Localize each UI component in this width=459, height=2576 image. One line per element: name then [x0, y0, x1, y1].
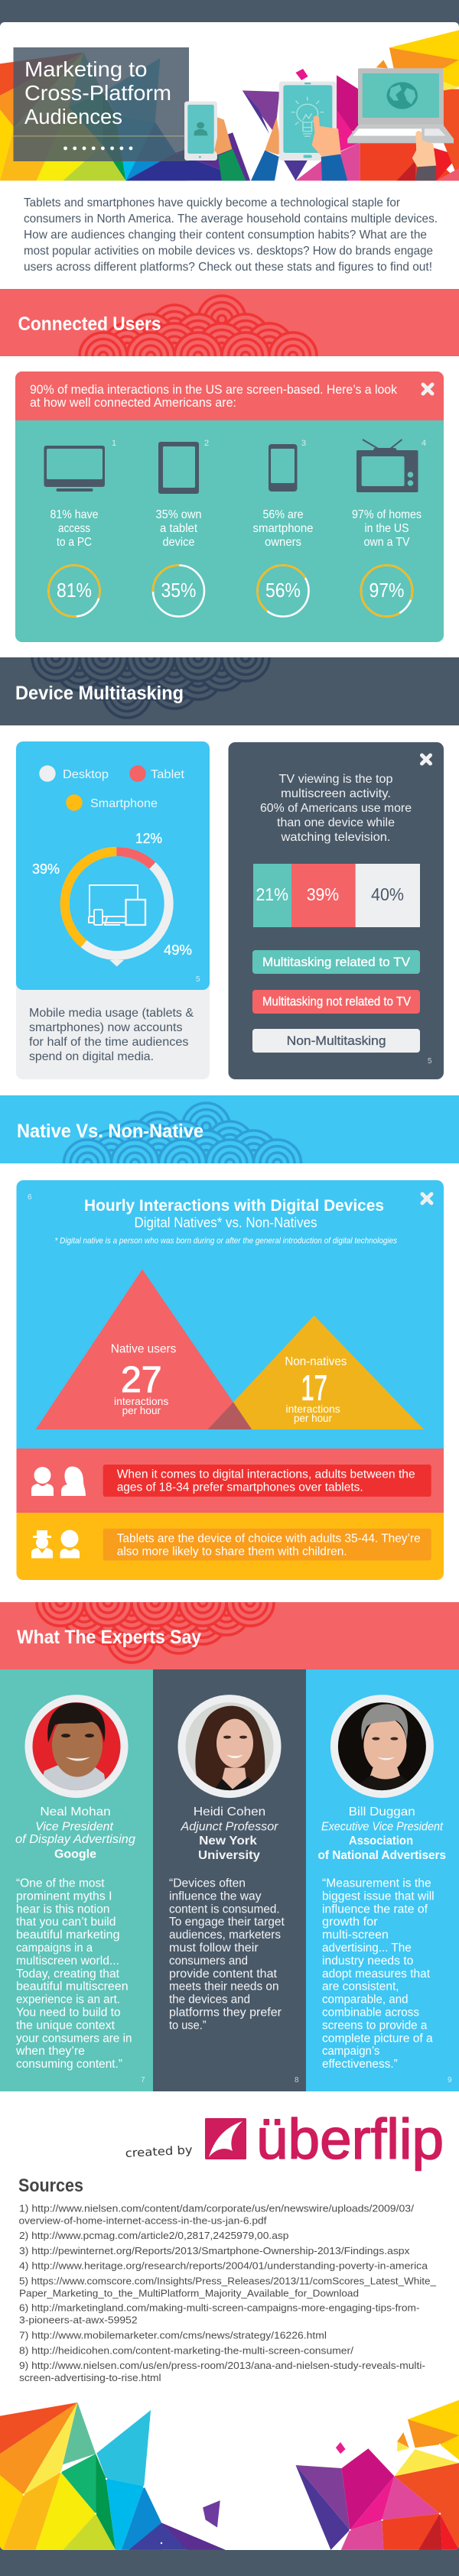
intro paragraph: consumers in North America. The average household contains multiple devices. [24, 213, 438, 225]
intro paragraph: most popular activities on mobile devices vs. desktops? How do brands engage [24, 245, 433, 258]
name and title: Heidi Cohen [194, 1805, 265, 1818]
heading: Connected Users [18, 313, 161, 335]
quote: experience is an art. [16, 1994, 120, 2007]
created by credit [125, 2107, 444, 2171]
chart title: * Digital native is a person who was born during or after the general introduction of digital technologies [55, 1237, 397, 1246]
quote: Today, creating that [16, 1968, 120, 1981]
quote: comparable, and [322, 1994, 409, 2007]
callout: 35-44: also more likely to share them with children. [117, 1545, 347, 1558]
legend button: related [252, 950, 420, 974]
intro paragraph: How are audiences changing their content consumption habits? What are the [24, 229, 427, 242]
intro paragraph [24, 196, 438, 274]
callout: 18-34: When it comes to digital interactions, adults between the [117, 1468, 415, 1481]
non-natives label: Non-natives [285, 1355, 347, 1368]
name and title: Bill Duggan [349, 1805, 415, 1818]
intro paragraph: users across different platforms? Check out these stats and figures to find out! [24, 261, 432, 274]
hero polygon artwork [0, 30, 459, 180]
progress ring: 35%: 35% [161, 579, 196, 602]
legend button: related: Multitasking related to TV [262, 955, 411, 969]
non-natives label [285, 1355, 347, 1424]
quote: consuming content.” [16, 2058, 122, 2071]
logo wordmark: überflip [256, 2107, 444, 2171]
sources [18, 2175, 437, 2383]
quote: “One of the most [16, 1877, 105, 1890]
stacked bar chart: 39% [307, 884, 339, 904]
donut chart: 39% [32, 861, 60, 877]
quote: campaigns in a [16, 1942, 93, 1955]
legend: Smartphone [90, 797, 158, 810]
stat: smartphone: smartphone [252, 522, 314, 535]
quote: multi-screen [322, 1929, 389, 1942]
quote: hear is this notion [16, 1903, 110, 1916]
icon: television: 4 [422, 439, 426, 448]
callout: 35-44 [103, 1529, 431, 1561]
stat: TV [352, 509, 421, 546]
legend: Desktop [63, 768, 109, 781]
icon: young man [31, 1467, 54, 1496]
sources list: screen-advertising-to-rise.html [19, 2372, 161, 2383]
title [24, 57, 171, 128]
quote: must follow their [169, 1942, 259, 1955]
icon: monitor [44, 439, 116, 492]
quote: campaign’s [322, 2045, 380, 2058]
icon: close [422, 755, 430, 764]
quote: provide content that [169, 1968, 278, 1981]
portrait: Heidi Cohen [177, 1695, 282, 1798]
stat: smartphone: 56% are [263, 508, 304, 521]
caption: Mobile media usage (tablets & [29, 1007, 194, 1020]
progress ring: 97%: 97% [369, 579, 404, 602]
progress ring: 81% [47, 563, 102, 618]
name and title: of Display Advertising [15, 1833, 135, 1846]
left polygon cluster [0, 2402, 226, 2550]
quote: screens to provide a [322, 2019, 428, 2032]
caption: spend on digital media. [29, 1050, 154, 1063]
quote: influence the way [169, 1890, 262, 1903]
sources list: 6) http://marketingland.com/making-multi-screen-campaigns-more-engaging-tips-from- [19, 2302, 419, 2314]
stacked bar chart: 21% [256, 884, 288, 904]
stat: tablet: a tablet [160, 522, 198, 535]
panel text: watching television. [280, 831, 390, 844]
caption [29, 1007, 194, 1063]
footer polygon artwork [0, 2400, 459, 2550]
native users label: per hour [122, 1404, 161, 1416]
footnote number: 8 [295, 2076, 299, 2084]
stat: smartphone: owners [265, 536, 301, 549]
footnote number: 9 [448, 2076, 452, 2084]
created by credit: created by [125, 2143, 193, 2160]
sources list: 1) http://www.nielsen.com/content/dam/corporate/us/en/newswire/uploads/2009/03/ [19, 2203, 414, 2214]
legend button: non-multitasking [252, 1029, 420, 1053]
footnote number: 5 [428, 1057, 432, 1066]
quote: multiscreen world... [16, 1955, 119, 1968]
right polygon cluster [295, 2400, 459, 2550]
heading: Device Multitasking [15, 683, 184, 704]
quote: You need to build to [16, 2006, 121, 2020]
quote: “Measurement is the [322, 1877, 431, 1890]
icon: man with hat [31, 1530, 53, 1558]
heading: What The Experts Say [17, 1627, 201, 1648]
name and title: of National Advertisers [318, 1849, 446, 1862]
progress ring: 81%: 81% [57, 579, 92, 602]
name and title: Association [349, 1835, 413, 1848]
icon: tablet with hands and light bulb [251, 82, 347, 180]
quote: content is consumed. [169, 1903, 280, 1916]
quote: effectiveness.” [322, 2058, 398, 2071]
legend button: not related: Multitasking not related to TV [262, 994, 412, 1009]
callout: 35-44: Tablets are the device of choice with adults 35-44. They’re [117, 1532, 421, 1546]
stat: PC: access [58, 522, 90, 535]
name and title: Executive Vice President [321, 1820, 443, 1833]
donut chart: 49% [164, 942, 192, 958]
name and title [318, 1805, 446, 1862]
title: Cross-Platform [24, 81, 171, 105]
sources list: 2) http://www.pcmag.com/article2/0,2817,2425979,00.asp [19, 2230, 289, 2241]
sources list: 7) http://www.mobilemarketer.com/cms/news/strategy/16226.html [19, 2329, 327, 2341]
stat: PC: to a PC [57, 536, 92, 549]
section band: Connected Users [0, 289, 459, 356]
panel: Heidi Cohen [153, 1669, 306, 2091]
quote: are consistent, [322, 1981, 399, 1994]
panel intro text: 90% of media interactions in the US are screen-based. Here’s a look [30, 382, 397, 397]
icon: phone with hand [184, 102, 246, 180]
icon: monitor: 1 [112, 439, 116, 448]
section band: Device Multitasking [0, 657, 459, 725]
icon: woman [60, 1530, 80, 1558]
native users label: interactions [114, 1395, 168, 1407]
name and title: University [198, 1849, 260, 1862]
panel text: 60% of Americans use more [260, 802, 412, 815]
section band: What The Experts Say [0, 1602, 459, 1669]
footnote number: 7 [141, 2076, 145, 2084]
quote: advertising... The [322, 1942, 412, 1955]
title box [14, 47, 189, 161]
sources list: 8) http://heidicohen.com/content-marketing-the-multi-screen-consumer/ [19, 2345, 353, 2356]
quote: adopt measures that [322, 1968, 431, 1981]
footnote number: 5 [196, 975, 200, 984]
name and title: Adjunct Professor [180, 1820, 278, 1833]
title: Marketing to [24, 57, 147, 81]
logo mark [205, 2118, 246, 2159]
progress ring: 97% [360, 564, 413, 618]
panel: Neal Mohan [0, 1669, 153, 2091]
quote: your consumers are in [16, 2032, 132, 2045]
quote: beautiful multiscreen [16, 1981, 129, 1994]
quote: influence the rate of [322, 1903, 428, 1916]
stat: tablet [156, 510, 201, 546]
quote: the unique context [16, 2019, 116, 2032]
quote: “Devices often [169, 1877, 246, 1890]
progress ring: 56% [256, 564, 310, 618]
quote: To engage their target [169, 1916, 285, 1929]
sources list: 4) http://www.heritage.org/research/reports/2004/01/understanding-poverty-in-america [19, 2260, 428, 2272]
native users label: Native users [111, 1343, 176, 1356]
sources list: 3) http://pewinternet.org/Reports/2013/Smartphone-Ownership-2013/Findings.aspx [19, 2245, 410, 2256]
stat: PC: 81% have [50, 508, 99, 521]
stat: TV: 97% of homes [352, 508, 422, 521]
footer vertex dots [23, 2444, 441, 2544]
legend button: non-multitasking: Non-Multitasking [287, 1033, 386, 1048]
panel: hourly interactions [17, 1180, 444, 1580]
chart title: Digital Natives* vs. Non-Natives [135, 1215, 317, 1230]
non-natives label: interactions [286, 1403, 340, 1415]
icon: tablet: 2 [204, 439, 209, 448]
portrait: Neal Mohan [24, 1695, 129, 1798]
name and title [15, 1805, 135, 1861]
sources list: Paper_Marketing_to_the_MultiPlatform_Majority_Available_for_Download [19, 2287, 359, 2299]
icon: smartphone: 3 [301, 439, 306, 448]
name and title: Neal Mohan [40, 1805, 111, 1818]
chart title: Hourly Interactions with Digital Devices [84, 1197, 384, 1215]
stat: TV: in the US [364, 522, 409, 535]
panel: TV multitasking [228, 742, 444, 1079]
quote: that you can’t build [16, 1916, 116, 1929]
quote: platforms they prefer [169, 2006, 282, 2020]
icon: laptop with hand and globe [347, 68, 454, 180]
icon: close [422, 1194, 431, 1203]
icon: tablet [158, 439, 209, 494]
progress ring: 56%: 56% [265, 579, 301, 602]
sources list: 9) http://www.nielsen.com/us/en/press-room/2013/ana-and-nielsen-study-reveals-multi- [19, 2360, 425, 2371]
triangle chart [36, 1269, 424, 1429]
quote: when they’re [15, 2045, 85, 2058]
quote [15, 1877, 132, 2071]
name and title: Google [54, 1848, 96, 1861]
footnote number: 6 [28, 1193, 32, 1202]
panel text: multiscreen activity. [281, 787, 391, 800]
legend [39, 765, 185, 811]
quote: industry needs to [322, 1955, 413, 1968]
portrait: Bill Duggan [330, 1695, 434, 1798]
donut chart: 12% [135, 831, 162, 846]
name and title: New York [199, 1835, 257, 1848]
stat: PC [50, 509, 98, 546]
caption: smartphones) now accounts [29, 1021, 182, 1034]
sources list [18, 2203, 437, 2383]
sources list: 3-pioneers-at-awx-59952 [19, 2315, 138, 2326]
quote [322, 1877, 435, 2071]
sources list: 5) https://www.comscore.com/Insights/Press_Releases/2013/11/comScores_Latest_White_ [19, 2276, 437, 2287]
name and title [180, 1805, 278, 1862]
callout: 18-34 [103, 1465, 431, 1497]
caption: for half of the time audiences [29, 1036, 188, 1049]
panel: connected users [15, 371, 444, 642]
quote: prominent myths I [16, 1890, 112, 1903]
icon: close [423, 384, 432, 394]
stacked bar chart [253, 864, 420, 927]
stacked bar chart: 40% [371, 884, 404, 904]
section band: Native Vs. Non-Native [0, 1095, 459, 1163]
quote: consumers and [169, 1955, 248, 1968]
quote: beautiful marketing [16, 1929, 119, 1942]
panel: Bill Duggan [306, 1669, 459, 2091]
donut chart [32, 831, 192, 966]
intro paragraph: Tablets and smartphones have quickly become a technological staple for [24, 196, 401, 209]
progress ring: 35% [152, 564, 205, 618]
callout: 18-34: ages of 18-34 prefer smartphones over tablets. [117, 1481, 363, 1494]
non-natives label: per hour [294, 1412, 332, 1424]
non-natives label: 17 [301, 1367, 327, 1407]
quote [169, 1877, 285, 2032]
icon: smartphone [269, 439, 306, 492]
stat: tablet: device [162, 536, 195, 549]
stat: TV: own a TV [364, 536, 410, 549]
native users label: 27 [121, 1360, 162, 1400]
native users label [111, 1343, 176, 1416]
stat: tablet: 35% own [156, 508, 202, 521]
quote: complete picture of a [322, 2032, 433, 2045]
quote: meets their needs on [169, 1981, 278, 1994]
name and title: Vice President [35, 1820, 113, 1833]
legend button: not related [252, 990, 420, 1014]
sources heading: Sources [18, 2175, 83, 2196]
icon: television [356, 439, 426, 492]
heading: Native Vs. Non-Native [17, 1121, 203, 1142]
panel text [260, 773, 412, 844]
panel text: TV viewing is the top [278, 773, 393, 786]
legend: Tablet [151, 768, 185, 781]
quote: the devices and [169, 1994, 250, 2007]
panel: device share donut [16, 741, 210, 1079]
title: Audiences [24, 105, 122, 128]
panel intro text [31, 384, 397, 407]
icon: young woman [61, 1466, 86, 1496]
chart title [55, 1197, 397, 1246]
panel intro text: at how well connected Americans are: [30, 395, 236, 410]
panel text: than one device while [277, 816, 395, 829]
quote: growth for [322, 1916, 378, 1929]
icon: devices [89, 885, 145, 925]
stat: smartphone [253, 510, 313, 546]
quote: biggest issue that will [322, 1890, 435, 1903]
hero banner [0, 30, 459, 180]
quote: combinable across [322, 2006, 419, 2020]
quote: audiences, marketers [169, 1929, 281, 1942]
quote: to use.” [169, 2019, 207, 2032]
sources list: overview-of-home-internet-access-in-the-us-jan-6.pdf [18, 2215, 267, 2227]
